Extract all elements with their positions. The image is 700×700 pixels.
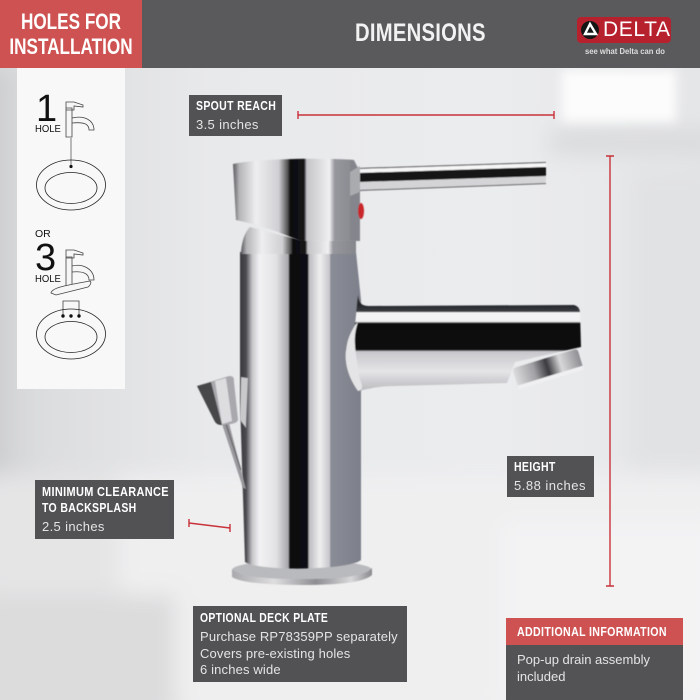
panel: additional information bbox=[506, 618, 683, 700]
callout: spout reach bbox=[189, 95, 282, 136]
or three hole label: HOLE bbox=[35, 274, 61, 285]
logo triangle icon bbox=[581, 21, 599, 39]
pop-up drain rod bbox=[197, 376, 248, 489]
logo wordmark: DELTA bbox=[603, 18, 671, 41]
faucet lever bbox=[350, 162, 546, 196]
logo tagline: see what Delta can do bbox=[585, 46, 665, 56]
heading: holes for installation bbox=[0, 0, 142, 68]
callout: optional deck plate: Covers pre-existing holes bbox=[200, 646, 350, 660]
callout: optional deck plate: 6 inches wide bbox=[200, 662, 281, 677]
panel: hole options bbox=[17, 68, 125, 389]
heading: dimensions: DIMENSIONS bbox=[355, 19, 486, 47]
callout: minimum clearance bbox=[35, 480, 174, 539]
faucet aerator bbox=[512, 349, 584, 389]
callout: minimum clearance: MINIMUM CLEARANCE bbox=[42, 485, 169, 499]
or three hole label bbox=[35, 228, 61, 285]
callout: spout reach: 3.5 inches bbox=[196, 117, 259, 132]
height dimension line bbox=[606, 156, 614, 586]
or three hole label: 3 bbox=[35, 237, 56, 279]
callout: minimum clearance: 2.5 inches bbox=[42, 519, 105, 534]
backsplash clearance dimension line bbox=[189, 519, 230, 532]
icon: one hole faucet and sink bbox=[36, 102, 106, 210]
additional information title: ADDITIONAL INFORMATION bbox=[517, 625, 667, 639]
callout: height: HEIGHT bbox=[514, 460, 556, 474]
one hole label: HOLE bbox=[35, 124, 61, 135]
callout: optional deck plate: OPTIONAL DECK PLATE bbox=[200, 611, 328, 625]
additional information heading bbox=[506, 618, 683, 645]
callout: minimum clearance: TO BACKSPLASH bbox=[42, 501, 137, 515]
faucet base plate bbox=[232, 560, 372, 585]
logo: Delta bbox=[577, 17, 671, 56]
callout: optional deck plate bbox=[193, 606, 407, 682]
icon: three hole faucet and sink bbox=[36, 250, 106, 360]
heading: holes for installation: INSTALLATION bbox=[9, 34, 133, 59]
one hole label: 1 bbox=[36, 88, 57, 130]
or three hole label: OR bbox=[35, 228, 51, 240]
logo badge bbox=[577, 17, 671, 43]
faucet handle cap bbox=[233, 159, 364, 241]
heading: holes for installation: HOLES FOR bbox=[21, 9, 121, 34]
header bar: dimensions bbox=[0, 0, 700, 68]
faucet spout bbox=[346, 295, 581, 391]
callout: height: 5.88 inches bbox=[514, 478, 586, 493]
spout reach dimension line bbox=[298, 111, 554, 119]
faucet body bbox=[240, 227, 361, 569]
additional information text: Pop-up drain assembly included bbox=[517, 652, 650, 684]
callout: height bbox=[507, 456, 594, 497]
callout: optional deck plate: Purchase RP78359PP separately bbox=[200, 629, 398, 644]
callout: spout reach: SPOUT REACH bbox=[196, 99, 276, 113]
